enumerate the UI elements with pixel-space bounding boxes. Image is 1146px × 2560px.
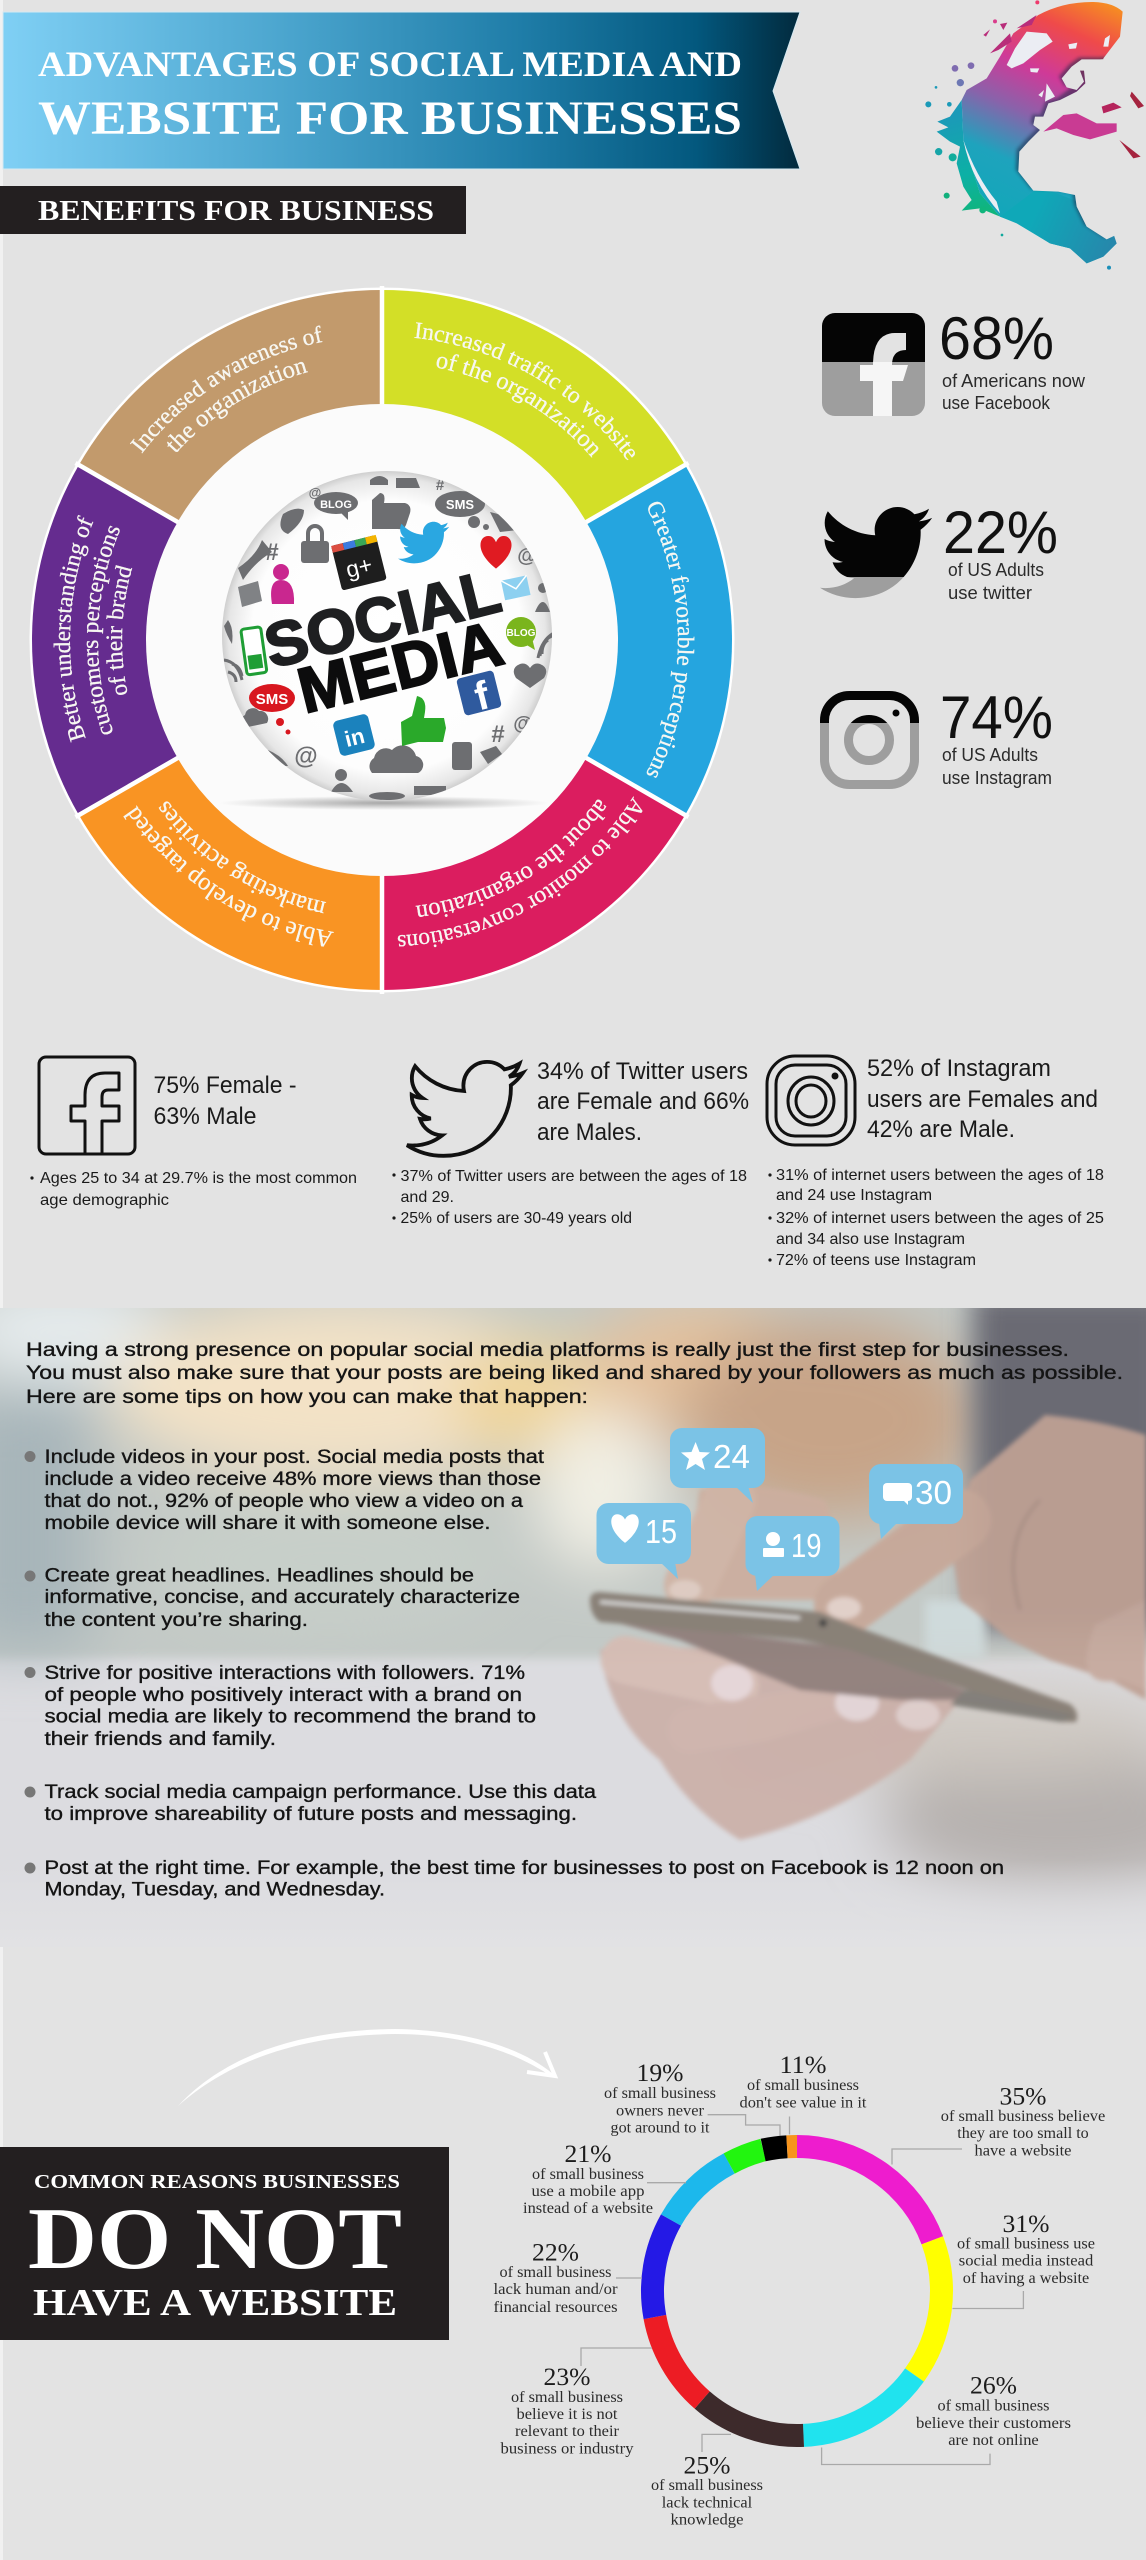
label: 11%	[740, 2052, 867, 2112]
icon: grey hash and at signs: @	[517, 545, 537, 567]
stat: facebook 68%: of Americans now	[942, 371, 1086, 391]
segment: 23% red	[655, 2317, 702, 2400]
icon: blue mail	[501, 575, 531, 600]
bubble: star 24: 24	[713, 1438, 750, 1475]
segment: 21% light blue	[671, 2164, 729, 2220]
demographic: instagram: 32% of internet users between the ages of 25	[776, 1210, 1104, 1227]
tip: tracking	[24, 1782, 596, 1825]
tip: headlines: informative, concise, and accurately characterize	[44, 1587, 520, 1608]
icon: green phone	[241, 627, 267, 675]
segment: 35% magenta	[797, 2146, 932, 2240]
icon: grey hash and at signs: BLOG	[320, 499, 352, 511]
label: 31%	[957, 2211, 1095, 2287]
tip: interactions: social media are likely to recommend the brand to	[44, 1706, 536, 1728]
tip: interactions: their friends and family.	[44, 1729, 276, 1750]
heading: benefits for business	[0, 186, 466, 234]
segment: increased traffic	[384, 290, 684, 520]
segment: brand perceptions: Better understanding of	[53, 514, 94, 742]
segment: 26% cyan	[804, 2375, 914, 2435]
bubble: heart 15: 15	[645, 1513, 677, 1550]
demographic: twitter: are Males.	[537, 1119, 642, 1146]
segment: brand perceptions: of their brand	[106, 565, 132, 695]
heading box: do not have a website	[0, 2147, 449, 2340]
tip: videos: include a video receive 48% more views than those	[44, 1469, 541, 1490]
label: 31%: of having a website	[963, 2270, 1089, 2287]
segment: 31% yellow	[914, 2240, 941, 2375]
label: 22%	[494, 2240, 618, 2316]
label: 23%: business or industry	[500, 2440, 634, 2458]
demographic: facebook: age demographic	[40, 1192, 169, 1209]
tip: videos	[24, 1447, 545, 1534]
label: 25%: knowledge	[670, 2512, 744, 2528]
heading box: do not have a website: DO NOT	[28, 2191, 402, 2288]
donut: benefits wheel	[30, 286, 734, 994]
text: social media	[266, 574, 506, 714]
heading box: do not have a website: COMMON REASONS BUSINESSES	[34, 2171, 400, 2193]
panel: tips over blurred phone photo	[0, 1280, 1146, 1947]
title line 1: ADVANTAGES OF SOCIAL MEDIA AND	[38, 44, 742, 84]
label: 26%: of small business	[938, 2398, 1050, 2414]
label: 19%: owners never	[616, 2102, 705, 2120]
intro paragraph	[26, 1340, 1123, 1408]
label: 35%	[941, 2084, 1105, 2160]
label: 26%: 26%	[970, 2372, 1017, 2400]
demographic: instagram: 42% are Male.	[867, 1116, 1015, 1143]
stat: twitter 22%	[820, 507, 1056, 599]
label: 26%: are not online	[948, 2432, 1039, 2449]
demographic: instagram: and 24 use Instagram	[776, 1187, 932, 1204]
icon: facebook square: f	[470, 673, 494, 719]
tip: timing	[24, 1858, 1004, 1900]
segment: favorable perceptions	[588, 467, 732, 813]
demographic: instagram: 72% of teens use Instagram	[776, 1252, 976, 1269]
segment: increased traffic: of the organization	[436, 354, 598, 458]
label: 22%: financial resources	[494, 2299, 618, 2316]
label: 26%	[916, 2372, 1071, 2449]
label: 21%: of small business	[532, 2166, 644, 2183]
icon: pink person	[271, 564, 294, 604]
demographic: instagram: users are Females and	[867, 1086, 1098, 1113]
label: 23%: of small business	[511, 2389, 623, 2406]
label: 25%: lack technical	[662, 2494, 752, 2512]
tip: interactions: Strive for positive interactions with followers. 71%	[44, 1663, 525, 1684]
demographic: instagram: and 34 also use Instagram	[776, 1231, 965, 1248]
label: 19%: of small business	[604, 2085, 716, 2102]
text: social media: MEDIA	[291, 607, 510, 727]
social media sphere	[222, 471, 556, 801]
icon: instagram outline	[767, 1056, 855, 1145]
label: 25%: of small business	[651, 2477, 763, 2494]
icon: colourful globe	[925, 0, 1146, 270]
icon: google plus	[331, 535, 387, 591]
label: 23%: believe it is not	[516, 2406, 618, 2423]
icon: grey hash and at signs: #	[491, 721, 505, 748]
tip: headlines: the content you’re sharing.	[44, 1610, 308, 1631]
label: 19%: got around to it	[610, 2120, 710, 2136]
heading: benefits for business: BENEFITS FOR BUSINESS	[38, 195, 434, 227]
icon: red sms bubble: SMS	[256, 691, 288, 708]
label: 35%: have a website	[974, 2142, 1072, 2160]
stat: instagram 74%: 74%	[940, 684, 1053, 751]
label: 21%: 21%	[564, 2141, 612, 2168]
label: 11%: of small business	[747, 2077, 859, 2094]
tip: headlines	[24, 1566, 520, 1631]
icon: linkedin square	[332, 713, 376, 757]
segment: monitor conversations: Able to monitor conversations	[398, 796, 643, 948]
label: 19%	[604, 2060, 716, 2136]
demographic: twitter: 25% of users are 30-49 years old	[400, 1210, 632, 1227]
segment: 11% orange	[787, 2135, 797, 2158]
segment: targeted marketing: Able to develop targeted	[123, 805, 334, 947]
tip: tracking: Track social media campaign performance. Use this data	[44, 1782, 596, 1803]
icon: grey bubbles and small shapes	[224, 476, 550, 800]
intro paragraph: Here are some tips on how you can make that happen:	[26, 1387, 588, 1408]
demographic: facebook	[30, 1057, 357, 1209]
label: 23%: 23%	[544, 2364, 590, 2391]
icon: facebook outline	[39, 1057, 135, 1154]
label: 35%: 35%	[1000, 2084, 1046, 2110]
segment: increased awareness: the organization	[167, 362, 308, 452]
tip: videos: Include videos in your post. Social media posts that	[44, 1447, 545, 1468]
arrow: curved white	[178, 2029, 555, 2106]
segment: black	[763, 2147, 787, 2150]
stat: twitter 22%: 22%	[943, 499, 1058, 566]
label: 11%: 11%	[780, 2052, 826, 2079]
tip: tracking: to improve shareability of future posts and messaging.	[44, 1804, 577, 1825]
donut chart: reasons	[652, 2146, 941, 2436]
sphere shadow	[219, 796, 549, 810]
demographic: twitter	[392, 1058, 749, 1227]
label: 21%	[523, 2141, 653, 2217]
bubble: star 24	[670, 1428, 765, 1503]
segment: increased traffic: Increased traffic to website	[414, 322, 635, 460]
stat: instagram 74%: of US Adults	[942, 745, 1038, 765]
title line 2: WEBSITE FOR BUSINESSES	[38, 92, 742, 145]
bubble: person 19	[746, 1516, 840, 1591]
icon: grey hash and at signs: @	[513, 713, 533, 735]
stat: facebook 68%	[822, 305, 1086, 416]
label: 31%: of small business use	[957, 2236, 1095, 2252]
stat: instagram 74%: use Instagram	[942, 768, 1052, 788]
demographic: twitter: 34% of Twitter users	[537, 1058, 748, 1085]
icon: grey hash and at signs	[265, 477, 537, 770]
bubble: chat 30	[869, 1464, 963, 1539]
icon: green blog bubble	[506, 617, 536, 650]
tip: videos: that do not., 92% of people who view a video on a	[44, 1491, 523, 1512]
stat: facebook 68%: 68%	[939, 305, 1054, 372]
icon: google plus: g+	[343, 551, 375, 583]
segment: monitor conversations: about the organization	[416, 800, 606, 917]
leader lines	[581, 2115, 1023, 2464]
heading box: do not have a website: HAVE A WEBSITE	[33, 2282, 397, 2324]
demographic: facebook: 63% Male	[154, 1103, 256, 1130]
demographic: twitter: and 29.	[400, 1189, 454, 1206]
label: 35%: of small business believe	[941, 2108, 1105, 2125]
bubble: heart 15	[596, 1503, 691, 1579]
icon: twitter bird	[398, 522, 449, 563]
segment: brand perceptions	[32, 467, 176, 813]
bubble: person 19: 19	[791, 1527, 822, 1564]
demographic: facebook: 75% Female -	[154, 1072, 296, 1099]
segment: increased awareness	[80, 290, 380, 520]
tip: timing: Post at the right time. For example, the best time for businesses to post on Facebook is 12 noon on	[44, 1858, 1004, 1879]
label: 31%: 31%	[1002, 2211, 1050, 2238]
label: 31%: social media instead	[959, 2252, 1094, 2270]
icon: grey hash and at signs: @	[294, 743, 318, 770]
label: 35%: they are too small to	[957, 2125, 1089, 2142]
label: 11%: don't see value in it	[740, 2094, 867, 2112]
label: 19%: 19%	[636, 2060, 684, 2087]
segment: increased awareness: Increased awareness of	[130, 326, 322, 454]
segment: targeted marketing	[80, 760, 380, 990]
icon: twitter outline	[407, 1062, 523, 1156]
bubble: chat 30: 30	[915, 1474, 952, 1511]
intro paragraph: You must also make sure that your posts are being liked and shared by your followers as much as possible.	[26, 1363, 1123, 1384]
label: 23%	[500, 2364, 634, 2458]
label: 25%	[651, 2452, 763, 2528]
label: 23%: relevant to their	[515, 2423, 620, 2440]
demographic: instagram: 31% of internet users between the ages of 18	[776, 1167, 1104, 1184]
tip: interactions: of people who positively interact with a brand on	[44, 1685, 522, 1706]
segment: monitor conversations	[384, 760, 684, 990]
icon: facebook split	[822, 313, 925, 416]
label: 26%: believe their customers	[916, 2415, 1071, 2432]
icon: grey wifi arcs	[224, 632, 556, 682]
photo: hands and phone	[590, 1415, 1146, 1840]
icon: red heart	[480, 536, 512, 569]
label: 21%: use a mobile app	[532, 2183, 645, 2200]
tip: headlines: Create great headlines. Headlines should be	[44, 1566, 474, 1586]
demographic: twitter: are Female and 66%	[537, 1088, 749, 1115]
label: 25%: 25%	[684, 2452, 730, 2480]
label: 21%: instead of a website	[523, 2200, 653, 2217]
segment: favorable perceptions: Greater favorable perceptions	[646, 502, 694, 778]
title banner	[3, 12, 800, 169]
photo background	[0, 1280, 1146, 1947]
label: 22%: lack human and/or	[494, 2281, 618, 2298]
tip: videos: mobile device will share it with someone else.	[44, 1513, 490, 1534]
icon: grey hash and at signs: #	[436, 477, 445, 494]
label: 22%: 22%	[532, 2240, 579, 2266]
icon: facebook square	[456, 670, 502, 716]
icon: grey hash and at signs: #	[265, 539, 279, 566]
stat: twitter 22%: use twitter	[948, 583, 1032, 603]
segment: 19% green	[729, 2150, 763, 2164]
demographic: facebook: Ages 25 to 34 at 29.7% is the most common	[40, 1170, 357, 1187]
tip: interactions	[24, 1663, 536, 1750]
segment: brand perceptions: customers perceptions	[86, 526, 120, 734]
segment: 22% blue	[652, 2220, 671, 2317]
tip: timing: Monday, Tuesday, and Wednesday.	[44, 1880, 385, 1900]
stat: facebook 68%: use Facebook	[942, 393, 1051, 413]
icon: grey hash and at signs: @	[309, 485, 321, 500]
icon: red sms bubble	[249, 684, 295, 734]
segment: targeted marketing: marketing activities	[158, 801, 326, 914]
demographic: twitter: 37% of Twitter users are between the ages of 18	[400, 1168, 747, 1185]
icon: twitter split	[820, 507, 932, 598]
label: 22%: of small business	[500, 2264, 612, 2281]
demographic: instagram	[767, 1055, 1104, 1269]
demographic: instagram: 52% of Instagram	[867, 1055, 1051, 1082]
icon: green blog bubble: BLOG	[507, 628, 536, 639]
segment: 25% brown	[702, 2400, 804, 2436]
icon: instagram split	[824, 696, 914, 784]
stat: twitter 22%: of US Adults	[948, 560, 1044, 580]
intro paragraph: Having a strong presence on popular social media platforms is really just the first step for businesses.	[26, 1340, 1069, 1361]
icon: linkedin square: in	[342, 723, 367, 752]
text: social media: SOCIAL	[258, 557, 507, 682]
icon: grey hash and at signs: SMS	[446, 497, 474, 512]
stat: instagram 74%	[824, 684, 1053, 788]
icon: green thumb	[401, 696, 446, 746]
